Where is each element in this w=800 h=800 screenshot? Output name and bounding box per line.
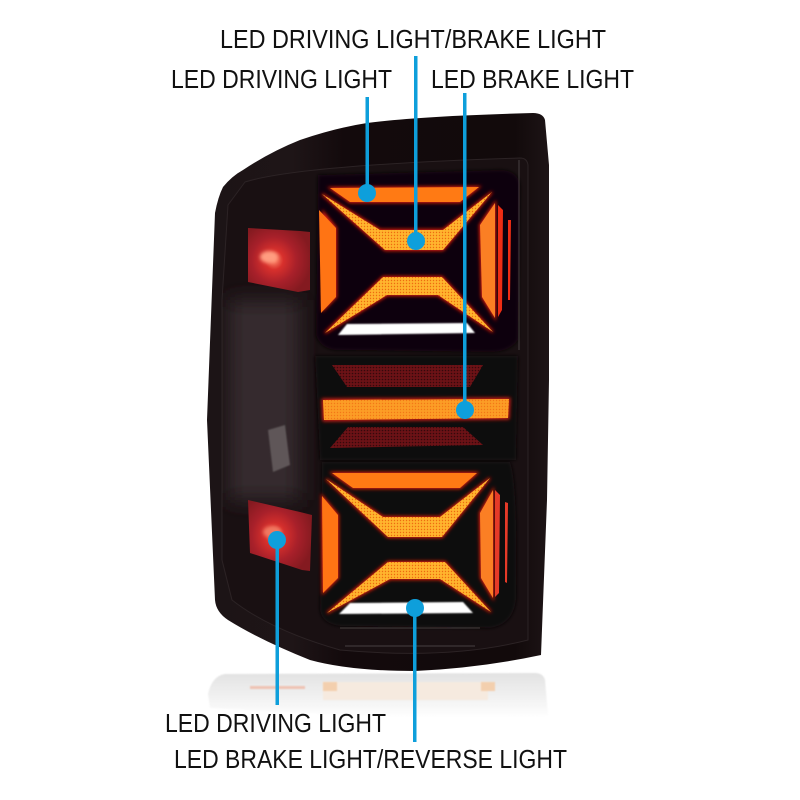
lamp housing: [207, 113, 549, 671]
side marker lamp bottom: [248, 500, 312, 571]
brake bar: [323, 399, 509, 420]
upper X LED strip: [322, 192, 492, 250]
upper lens recess: [316, 170, 520, 352]
left bar: [322, 496, 338, 593]
middle reflectors and brake bar: [323, 365, 509, 448]
white reverse strip: [339, 602, 473, 614]
upper reflector: [332, 365, 483, 387]
upper lens light module: [319, 187, 511, 335]
callout line: LED driving light / brake light: [407, 56, 425, 250]
upper X LED strip: [326, 478, 490, 537]
label: LED brake light: LED BRAKE LIGHT: [431, 64, 634, 94]
infographic: LED tail light diagram: [166, 29, 634, 768]
right bar: [480, 203, 495, 318]
left bar: [319, 210, 336, 313]
brake bar glow: [323, 399, 509, 420]
label: LED driving light / brake light: LED DRIVING LIGHT/BRAKE LIGHT: [220, 24, 606, 54]
lower lens recess: [320, 462, 516, 628]
lower lens light module: [322, 473, 508, 614]
callout line: LED brake light: [456, 93, 474, 419]
callout line: LED brake light / reverse light: [406, 599, 424, 742]
dark vertical wire: [254, 280, 258, 430]
housing sheen on left: [228, 300, 300, 500]
lower reflector: [330, 427, 483, 448]
glow: [322, 187, 495, 333]
housing inner bezel: [222, 158, 528, 653]
right bar: [480, 490, 493, 598]
red strips: [495, 490, 508, 597]
label: LED driving light top: LED DRIVING LIGHT: [171, 64, 392, 94]
callout line: LED driving light bottom: [268, 531, 286, 705]
side marker lamp top: [248, 228, 310, 292]
chrome edge lines: [340, 160, 519, 646]
callout line: LED driving light top: [358, 97, 376, 202]
lower X LED strip: [325, 277, 493, 333]
orange top bar: [332, 473, 477, 488]
label: LED brake light / reverse light: LED BRAKE LIGHT/REVERSE LIGHT: [174, 744, 567, 774]
white reverse strip: [338, 323, 475, 335]
red strips: [498, 205, 511, 317]
label: LED driving light bottom: LED DRIVING LIGHT: [165, 708, 386, 738]
glow: [322, 473, 493, 613]
lower X LED strip: [327, 562, 491, 613]
wiring shadow: [268, 425, 290, 472]
middle recess: [315, 356, 518, 460]
reflection below the lamp: [208, 673, 548, 718]
orange top bar: [330, 187, 479, 202]
